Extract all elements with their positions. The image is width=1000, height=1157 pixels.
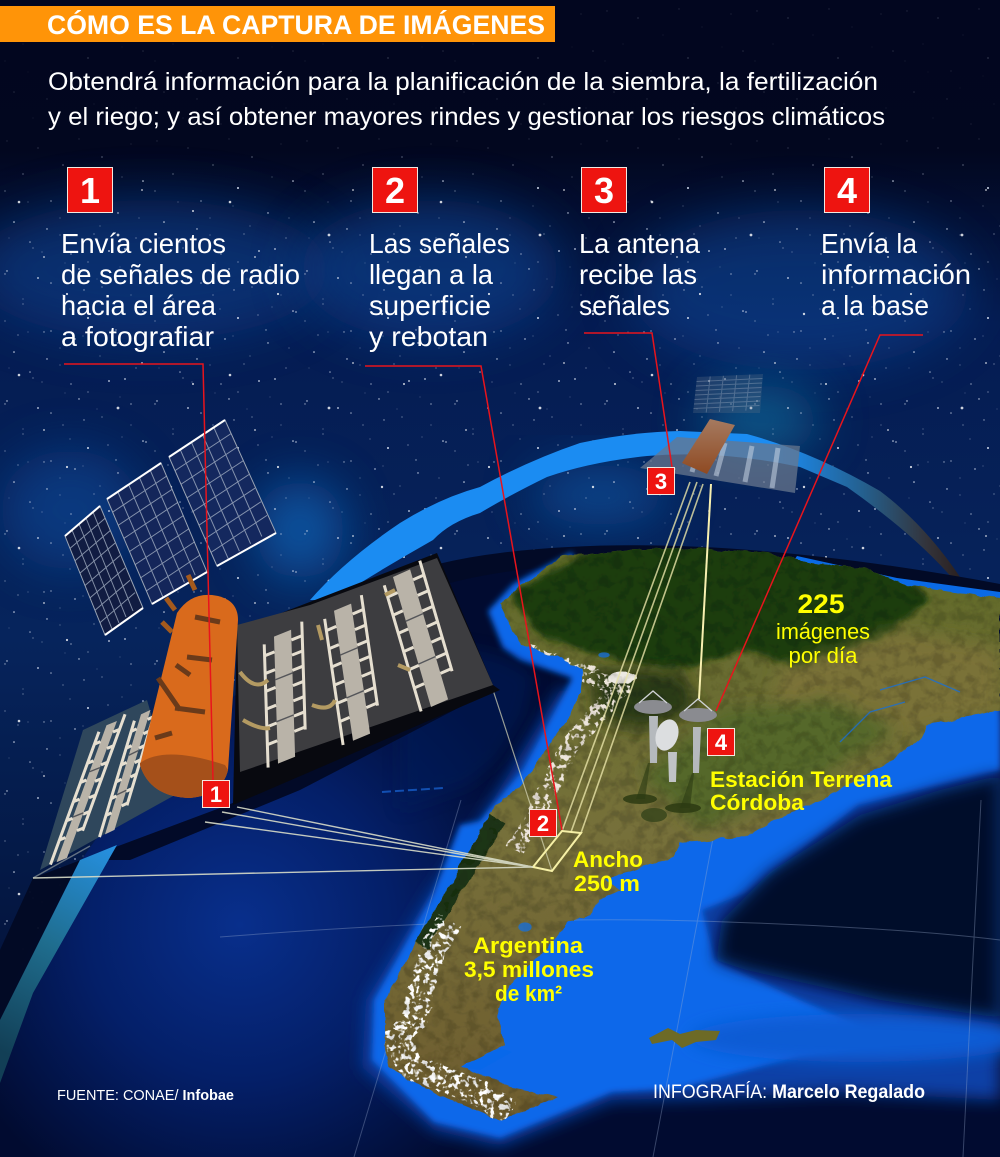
step 2 text: llegan a la	[369, 259, 493, 290]
step 2 text: Las señales	[369, 228, 510, 259]
step 2 text: y rebotan	[369, 321, 488, 352]
South America land mass	[370, 530, 1000, 1130]
thin line from panel edge to footprint	[493, 690, 552, 871]
label: Argentina 3,5 millones de km²: de km²	[495, 981, 562, 1006]
step 3 badge	[582, 168, 626, 212]
orange body	[140, 595, 238, 798]
label: Estación Terrena Córdoba	[710, 767, 893, 815]
map marker 1	[202, 780, 230, 808]
label: Ancho 250 m: Ancho	[573, 847, 643, 872]
dark shadow under big satellite	[0, 690, 493, 1020]
Amazon forest	[510, 535, 930, 670]
footprint 250 m swath	[533, 831, 581, 871]
map marker 3: 3	[655, 469, 667, 494]
pampas green	[640, 700, 900, 830]
leader line 1	[64, 364, 213, 780]
step 4 text: Envía la	[821, 228, 917, 259]
ocean and earth limb	[0, 550, 1000, 1157]
step 2 text: superficie	[369, 290, 491, 321]
intro text: Obtendrá información para la planificación de la siembra, la fertilización	[48, 68, 878, 96]
Terrain grain	[370, 530, 1000, 1130]
continental shelf	[362, 552, 1000, 1146]
label: Ancho 250 m	[573, 847, 643, 896]
label: Estación Terrena Córdoba: Estación Terrena	[710, 767, 893, 792]
downlink line to antenna	[699, 484, 711, 699]
step 3 text: La antena	[579, 228, 700, 259]
map marker 2	[530, 810, 556, 836]
step 1 text: hacia el área	[61, 290, 216, 321]
deep ocean basin	[716, 775, 1000, 1018]
Chile forest strip	[420, 818, 497, 945]
step 3 badge: 3	[594, 170, 614, 211]
body fittings	[155, 617, 220, 738]
label: Argentina 3,5 millones de km²	[464, 933, 594, 1006]
orbit arc	[310, 431, 960, 600]
step 1 text: Envía cientos	[61, 228, 226, 259]
leader line 2	[365, 366, 562, 830]
Andes snow	[396, 652, 618, 1112]
Snow field	[608, 672, 636, 684]
label: Argentina 3,5 millones de km²: 3,5 millones	[464, 957, 594, 982]
leader line 3	[584, 333, 672, 467]
step 2 text	[369, 228, 510, 352]
big satellite	[40, 420, 500, 870]
step 4 text: información	[821, 259, 971, 290]
step 1 badge: 1	[80, 170, 100, 211]
body bottom cap	[140, 754, 228, 798]
beams from satellite 1 to footprint	[33, 807, 533, 878]
Chaco dark area	[590, 670, 700, 730]
map marker 3	[648, 468, 674, 494]
step 2 badge	[372, 168, 418, 212]
intro text	[48, 68, 885, 131]
map marker 1: 1	[210, 782, 222, 807]
small satellite at position 3	[640, 374, 800, 493]
earth limb shadow	[320, 545, 1000, 625]
map marker 2: 2	[537, 811, 549, 836]
step 4 text: a la base	[821, 290, 929, 321]
step 2 badge: 2	[385, 170, 405, 211]
step 4 text	[821, 228, 971, 321]
map marker 4	[708, 728, 734, 756]
graticule lines	[220, 570, 1000, 1157]
rivers and lakes	[519, 653, 960, 931]
solar array	[65, 420, 276, 635]
step 4 badge	[824, 168, 870, 212]
step 1 badge	[68, 168, 112, 212]
Falkland islands	[649, 1028, 720, 1048]
step 4 badge: 4	[837, 170, 857, 211]
step 3 text	[579, 228, 700, 321]
label: 225 imágenes por día: imágenes	[776, 619, 870, 644]
label: 225 imágenes por día: por día	[788, 643, 858, 668]
central plains	[774, 616, 1000, 738]
step 1 text: a fotografiar	[61, 321, 214, 352]
ground station antennas	[623, 691, 717, 822]
step 3 text: recibe las	[579, 259, 697, 290]
label: Ancho 250 m: 250 m	[574, 871, 640, 896]
beams from satellite 3 to footprint	[562, 482, 703, 833]
leader line 4	[716, 335, 923, 711]
label: Argentina 3,5 millones de km²: Argentina	[473, 933, 584, 958]
step 1 text	[61, 228, 300, 352]
intro text: y el riego; y así obtener mayores rindes y gestionar los riesgos climáticos	[48, 103, 885, 131]
map marker 4: 4	[715, 730, 728, 755]
Tierra del Fuego strait	[461, 1048, 512, 1070]
step 3 text: señales	[579, 290, 670, 321]
title bar: CÓMO ES LA CAPTURA DE IMÁGENES	[47, 9, 545, 40]
label: 225 imágenes por día: 225	[798, 589, 844, 619]
step 1 text: de señales de radio	[61, 259, 300, 290]
radar panel right	[233, 553, 500, 805]
bay off Peru and Chile	[400, 648, 535, 810]
arms to solar array	[162, 575, 195, 632]
label: 225 imágenes por día	[776, 589, 870, 668]
radar panel left	[40, 700, 175, 870]
label: Estación Terrena Córdoba: Córdoba	[710, 790, 805, 815]
orbit tail bottom-left	[0, 845, 117, 1083]
infographic credit: INFOGRAFÍA: Marcelo Regalado	[653, 1082, 925, 1103]
blue ocean streaks	[382, 788, 443, 792]
source credit: FUENTE: CONAE/ Infobae	[57, 1087, 234, 1104]
